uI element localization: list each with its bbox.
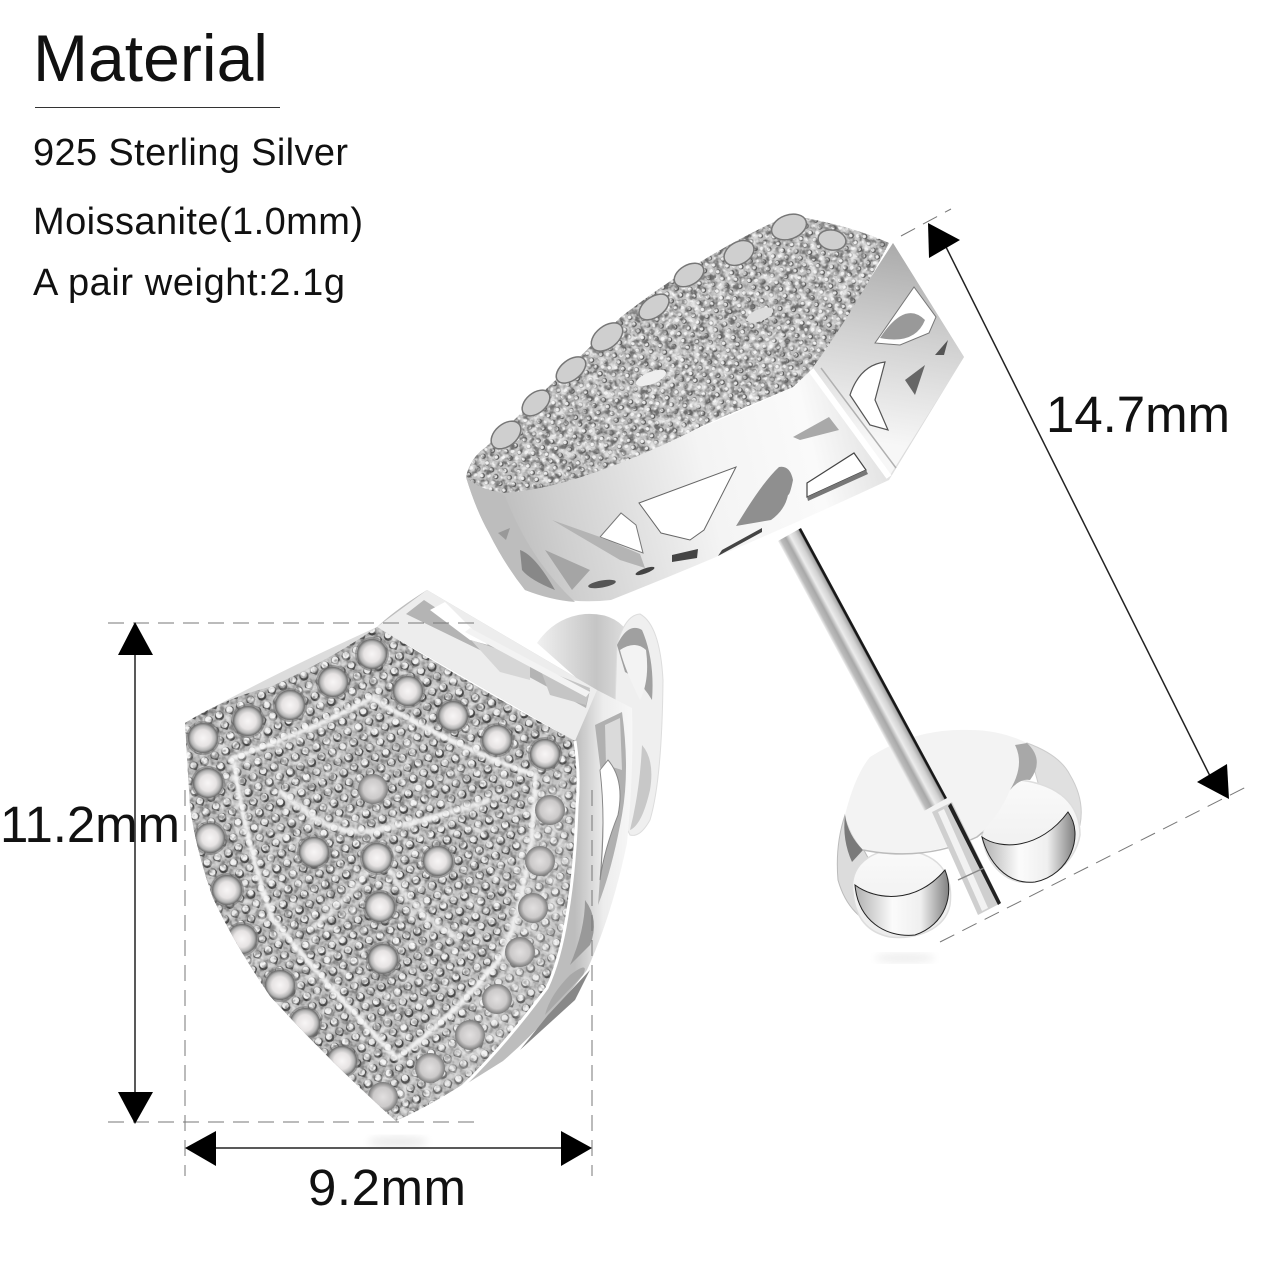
setting body [466,243,964,602]
back loop right [982,780,1080,882]
lower earring back post and wing [537,614,663,835]
width guide lines [185,790,592,1176]
arrow: length 14.7mm [928,223,1229,799]
material: pair weight: A pair weight:2.1g [33,262,345,304]
dimension label: 9.2mm: 9.2mm [308,1159,466,1216]
inner shield ridge [233,698,535,1058]
butterfly back [837,730,1081,938]
upper earring, side view [450,200,1081,938]
back disc [845,730,1027,855]
material: sterling silver: 925 Sterling Silver [33,132,348,174]
material text block [33,132,363,304]
post tip [932,802,1001,915]
openwork windows [498,287,948,590]
reflection of butterfly back [875,953,935,963]
reflection [368,1136,428,1148]
dimension label: 11.2mm: 11.2mm [0,796,180,853]
lower earring, shield front view [170,590,632,1148]
right side lighter zone [420,770,577,1100]
back wing left [837,815,880,918]
material: moissanite: Moissanite(1.0mm) [33,201,363,243]
inner gemstones [297,774,455,976]
back loop left [852,850,951,938]
shield pave face [185,627,577,1122]
title underline [35,106,280,108]
edge stones [486,210,848,454]
earring post [778,528,947,811]
back wing right [1027,743,1081,825]
side openwork [595,712,626,905]
pave top face [466,218,889,493]
shield edge highlight [397,741,578,1122]
arrow: height 11.2mm [118,622,153,1124]
border gemstones [186,637,565,1112]
arrow: width 9.2mm [185,1131,592,1166]
height guide lines [108,623,482,1122]
length guide lines [901,209,1252,942]
title: Material: Material [33,21,268,95]
top openwork [406,600,590,708]
shield side band [185,590,632,1122]
dimension label: 14.7mm: 14.7mm [1046,386,1230,443]
